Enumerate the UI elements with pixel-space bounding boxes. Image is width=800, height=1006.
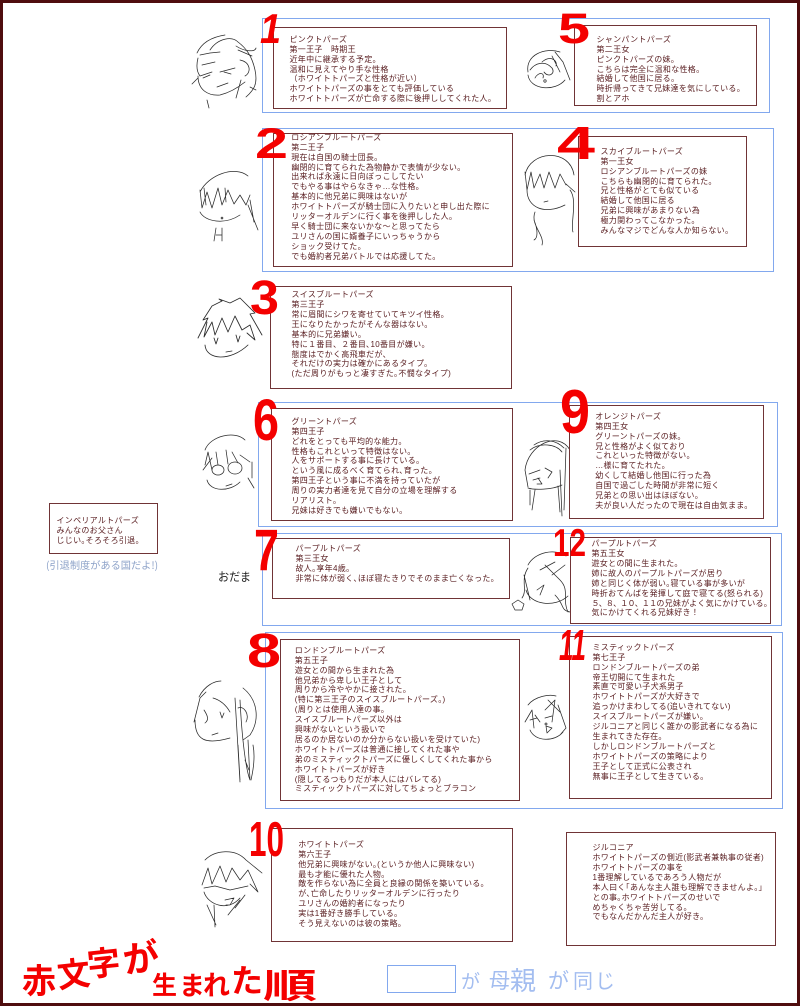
number 8: 8 [247,625,281,678]
handwritten legend title: red numerals show birth order: れ [203,971,230,1001]
handwritten legend title: red numerals show birth order: た [231,963,263,999]
text: Mystic Topaz profile: ミスティックトパーズ 第七王子 ロンドンブルートパーズの弟 帝王切開にて生まれた 素直で可愛い子犬系男子 ホワイトトパーズが大好きで 追っかけまわしてる(追いきれてない) スイスブルートパーズが嫌い。 ジルコニアと同じく誰かの影武者になる為に 生まれてきた存在。 しかしロンドンブルートパーズと ホワイトトパーズの策略により 王子として正式に公表され 無事に王子として生きている。 [592,643,758,781]
handwritten legend title: red numerals show birth order: 字 [85,943,122,984]
handwritten legend title: red numerals show birth order: が [120,936,162,981]
portrait: Champagne Topaz [528,51,570,88]
text: Imperial Topaz profile: インペリアルトパーズ みんなのお父さん じじい｡そろそろ引退。 [56,516,144,545]
panel: Russian Blue Topaz [273,133,513,267]
handwritten legend text: same mother: 母 [489,965,510,995]
text: Orange Topaz profile: オレンジトパーズ 第四王女 グリーントパーズの妹。 兄と性格がよく似ており これといった特徴がない。 …様に育てたれた。 幼くして結婚し他国に行った為 自国で過ごした時間が非常に短く 兄弟との思い出はほぼない。 夫が良い人だったので現在は自由気まま。 [595,412,753,510]
legend swatch: blue frame means same mother [387,964,456,992]
handwritten legend text: same mother: が [461,967,480,994]
number 11: 11 [559,621,586,670]
number 12: 12 [553,522,586,565]
number 9: 9 [560,378,590,447]
sibling group frame: 7 and 12 [262,532,782,626]
panel: Green Topaz [271,408,513,521]
panel: Sky Blue Topaz [578,136,747,247]
portrait: Swiss Blue Topaz [198,298,262,357]
number 4: 4 [557,117,596,169]
portrait: Mystic Topaz [525,695,566,739]
panel: Pink Topaz [272,26,507,108]
handwritten legend text: same mother [461,961,615,998]
text: White Topaz profile: ホワイトトパーズ 第六王子 他兄弟に興味がない｡(というか他人に興味ない) 最も才能に優れた人物。 敵を作らない為に全員と良縁の関係を築いている。 が､亡命したりリッターオルデンに行ったり ユリさんの婚約者になったり 実は1番好き勝手している。 そう見えないのは彼の策略。 [298,840,489,928]
sibling group frame: 1 and 5 [262,18,770,113]
portrait: Pink Topaz [192,35,256,108]
sibling group frame: 8 and 11 [265,632,782,808]
handwritten legend title: red numerals show birth order: ま [179,971,205,1001]
portrait: Sky Blue Topaz [525,155,575,245]
portrait: White Topaz [202,852,262,927]
handwritten legend title: red numerals show birth order: 順 [263,968,317,1006]
text: Purple Topaz fifth princess profile: パープルトパーズ 第五王女 遊女との間に生まれた。 姉に故人のパープルトパーズが居り 姉と同じく体が弱い｡寝ている事が多いが 時折おてんばを発揮して庭で寝てる(怒られる) ５、８、１０、１１の兄妹がよく気にかけている。 気にかけてくれる兄妹好き！ [592,539,772,617]
text: Sky Blue Topaz profile: スカイブルートパーズ 第一王女 ロシアンブルートパーズの妹 こちらも幽閉的に育てられた。 兄と性格がとても似ている 結婚して他国に居る 兄弟に興味があまりない為 極力関わってこなかった。 みんなマジでどんな人か知らない。 [600,147,733,235]
text: Russian Blue Topaz profile: ロシアンブルートパーズ 第二王子 現在は自国の騎士団長。 幽閉的に育てられた為物静かで表情が少ない。 出来れば永遠に日向ぼっこしてたい でもやる事はやらなきゃ…な性格。 基本的に他兄弟に興味はないが ホワイトトパーズが騎士団に入りたいと申し出た際に リッターオルデンに行く事を後押しした人。 早く騎士団に来ないかな～と思ってたら ユリさんの国に婿養子にいっちゃうから ショック受けてた。 でも婚約者兄弟バトルでは応援してた。 [291,133,490,261]
handwritten legend title: red numerals show birth order: 文 [55,954,92,995]
panel: Zirconia [566,832,776,946]
text: Green Topaz profile: グリーントパーズ 第四王子 どれをとっても平均的な能力。 性格もこれといって特徴はない。 人をサポートする事に長けている。 という風に成るべく育てられ､育った。 第四王子という事に不満を持っていたが 周りの実力者達を見て自分の立場を理解する リアリスト。 兄妹は好きでも嫌いでもない。 [292,417,458,515]
panel: Orange Topaz [569,405,764,519]
handwritten note: retirement system: (引退制度がある国だよ!) [46,557,158,572]
portrait: London Blue Topaz [194,681,256,782]
portrait: Orange Topaz [525,441,570,516]
handwritten legend text: same mother: じ [595,965,615,994]
panel: Champagne Topaz [574,25,757,106]
number 10: 10 [249,813,284,867]
number 7: 7 [254,518,279,583]
handwritten legend text: same mother: 親 [510,961,536,998]
handwritten legend text: same mother: が [548,965,569,995]
number 1: 1 [260,5,281,52]
panel: Imperial Topaz [49,503,158,554]
panel: London Blue Topaz [280,639,520,801]
portrait: Green Topaz [203,435,254,489]
handwritten legend title: red numerals show birth order: 生 [152,972,177,1000]
panel: Purple Topaz (deceased) [272,538,510,599]
number 5: 5 [558,5,590,53]
panel: Mystic Topaz [569,636,772,799]
handwritten legend text: same mother: 同 [573,965,593,994]
panel: Swiss Blue Topaz [270,286,512,389]
number 3: 3 [250,272,279,325]
number 2: 2 [255,120,288,168]
text: London Blue Topaz profile: ロンドンブルートパーズ 第五王子 遊女との間から生まれた為 他兄弟から卑しい王子として 周りから冷ややかに接された。 (特に第三王子のスイスブルートパーズ。) (周りとは使用人達の事。 スイスブルートパーズ以外は 興味がないという扱いで 居るのか居ないのか分からない扱いを受けていた) ホワイトトパーズは普通に接してくれた事や 弟のミスティックトパーズに優しくしてくれた事から ホワイトトパーズが好き (隠してるつもりだが本人にはバレてる) ミスティックトパーズに対してちょっとブラコン [295,646,493,793]
text: Zirconia profile: ジルコニア ホワイトトパーズの側近(影武者兼執事の従者) ホワイトトパーズの事を 1番理解しているであろう人物だが 本人曰く｢あんな主人誰も理解できませんよ。｣ との事｡ホワイトトパーズのせいで めちゃくちゃ苦労してる。 でもなんだかんだ主人が好き。 [592,843,764,921]
handwritten legend title: red numerals show birth order [22,936,317,1006]
handwritten legend title: red numerals show birth order: 赤 [22,963,56,1001]
text: Swiss Blue Topaz profile: スイスブルートパーズ 第三王子 常に眉間にシワを寄せていてキツイ性格。 王になりたかったがそんな器はない。 基本的に兄弟嫌い。 特に１番目、２番目､10番目が嫌い。 態度はでかく高飛車だが、 それだけの実力は確かにあるタイプ。 (ただ周りがもっと凄すぎた｡不憫なタイプ) [291,290,451,378]
text: Purple Topaz deceased profile: パープルトパーズ 第三王女 故人｡享年4歳。 非常に体が弱く､ほぼ寝たきりでそのまま亡くなった。 [295,544,499,583]
sibling group frame: 6 and 9 [258,402,778,526]
panel: Purple Topaz (fifth princess) [570,537,771,624]
panel: White Topaz [271,828,513,942]
text: Champagne Topaz profile: シャンパントパーズ 第二王女 ピンクトパーズの妹。 こちらは完全に温和な性格。 結婚して他国に居る。 時折帰ってきて兄妹達を気にしている。 割とアホ [596,35,745,103]
portrait: Russian Blue Topaz [200,171,258,241]
number 6: 6 [253,388,279,453]
handwritten note: deceased sibling: おだま [218,570,251,584]
portrait: Purple Topaz 12 [512,552,570,612]
sibling group frame: 2 and 4 [262,128,774,272]
text: Pink Topaz profile: ピンクトパーズ 第一王子 時期王 近年中に継承する予定。 温和に見えてやり手な性格 （ホワイトトパーズと性格が近い） ホワイトトパーズの事をとても評価している ホワイトトパーズが亡命する際に後押ししてくれた人。 [290,35,496,103]
